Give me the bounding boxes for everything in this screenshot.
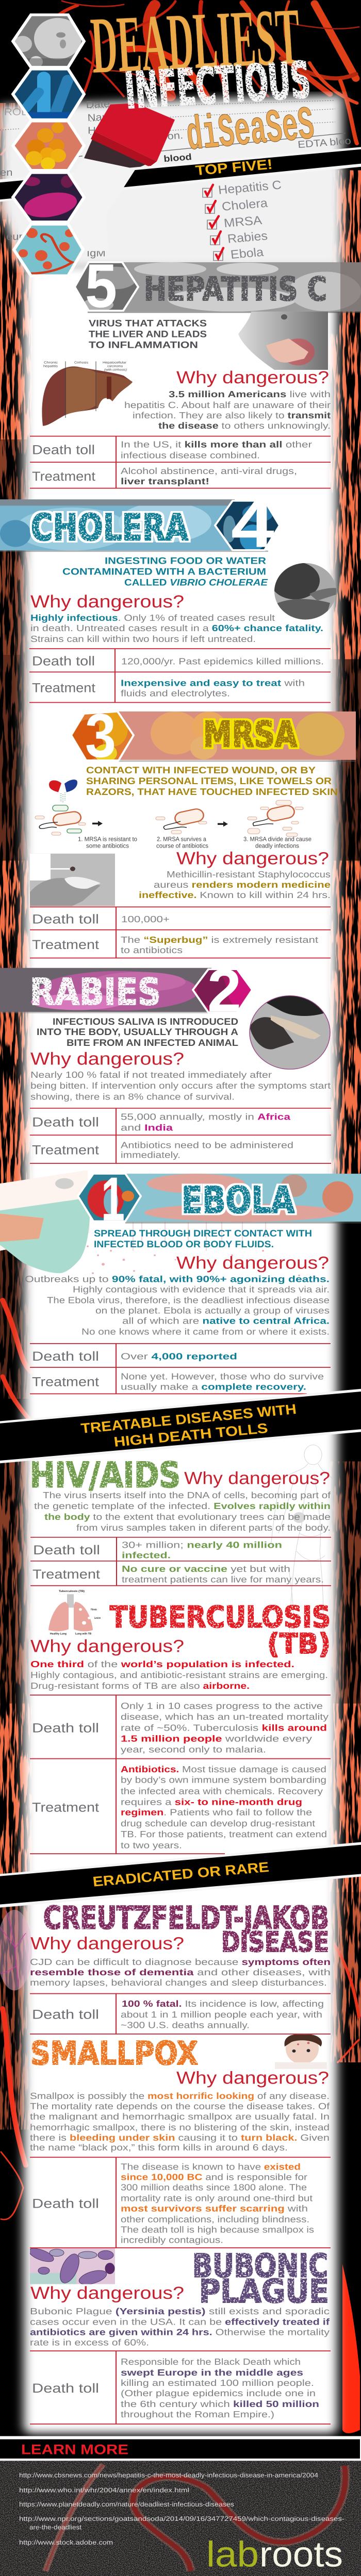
why dangerous: Strains can kill within two hours if left untreated. bbox=[30, 634, 256, 644]
why dangerous bbox=[30, 1934, 331, 1988]
why dangerous: antibiotics are given within 24 hrs. Otherwise the mortality bbox=[30, 2328, 330, 2337]
why dangerous: the name “black pox,” this form kills in around 6 days. bbox=[30, 2143, 288, 2153]
table bbox=[30, 1108, 331, 1163]
lungs diagram: Lesion bbox=[94, 1617, 101, 1620]
table: Antibiotics. Most tissue damage is caused bbox=[121, 1765, 326, 1774]
table: Death toll bbox=[32, 1721, 99, 1735]
hexagon: rabies virus bbox=[10, 172, 88, 223]
lab form paper bbox=[0, 95, 352, 269]
banner: eradicated or rare bbox=[0, 1842, 361, 1908]
logo: labroots bbox=[206, 2534, 343, 2574]
form text: eur bbox=[6, 231, 23, 242]
table bbox=[30, 907, 331, 958]
description: VIRUS THAT ATTACKS bbox=[89, 318, 207, 329]
banner: 2 bbox=[207, 957, 241, 1024]
banner: top five bbox=[0, 147, 361, 211]
why dangerous: Why dangerous? bbox=[176, 849, 329, 869]
table: disease, which has an un-treated mortality bbox=[121, 1712, 329, 1722]
why dangerous: being bitten. If intervention only occurs after the symptoms start bbox=[30, 1081, 331, 1091]
table: The death toll is high because smallpox is bbox=[121, 2225, 314, 2235]
blood splatter bbox=[87, 1222, 300, 1276]
why dangerous: hemorrhagic smallpox, there is no blistering of the skin, instead bbox=[30, 2123, 330, 2132]
form text: EDTA bloo bbox=[297, 135, 352, 150]
icon: capsule bbox=[49, 779, 77, 803]
description bbox=[89, 318, 207, 350]
table: Death toll bbox=[32, 2381, 99, 2396]
table bbox=[30, 1695, 331, 1854]
description: SPREAD THROUGH DIRECT CONTACT WITH bbox=[94, 1228, 312, 1239]
why dangerous: Outbreaks up to 90% fatal, with 90%+ agonizing deaths. bbox=[25, 1275, 330, 1284]
why dangerous: Why dangerous? bbox=[176, 368, 329, 387]
form text: blood bbox=[163, 152, 192, 164]
table: swept Europe in the middle ages bbox=[121, 2368, 303, 2378]
lungs diagram: Healthy Lung bbox=[50, 1632, 67, 1635]
description bbox=[62, 556, 268, 588]
table: Alcohol abstinence, anti-viral drugs, bbox=[121, 466, 297, 476]
liver illustration: Chronic bbox=[44, 361, 58, 364]
diagram: antibiotic resistance: 2. MRSA survives a bbox=[157, 836, 206, 842]
table: immediately. bbox=[121, 1150, 180, 1160]
banner: treatable diseases bbox=[0, 1389, 361, 1463]
illustration: body with blood vessels bbox=[271, 1445, 333, 1650]
description: CONTACT WITH INFECTED WOUND, OR BY bbox=[86, 765, 316, 775]
why dangerous: the disease to others unknowingly. bbox=[158, 421, 331, 431]
arrows bbox=[92, 823, 224, 825]
why dangerous bbox=[30, 1049, 331, 1102]
table: by body’s own immune system bombarding bbox=[121, 1775, 326, 1785]
why dangerous: The mortality rate depends on the course the disease takes. Of bbox=[30, 2102, 330, 2112]
why dangerous: Nearly 100 % fatal if not treated immediately after bbox=[30, 1070, 272, 1080]
table: Death toll bbox=[32, 912, 99, 927]
why dangerous bbox=[34, 1469, 331, 1533]
table: incredibly contagious. bbox=[121, 2235, 223, 2245]
banner: EBOLA bbox=[182, 1179, 294, 1222]
lungs diagram: Fibrosis bbox=[91, 1608, 97, 1611]
table: liver transplant! bbox=[121, 477, 209, 486]
table: and India bbox=[121, 1123, 173, 1133]
banner: RABIES bbox=[30, 971, 161, 1013]
banner bbox=[0, 499, 278, 552]
why dangerous: Highly infectious . Only 1% of treated cases result bbox=[30, 613, 275, 623]
description: SHARING PERSONAL ITEMS, LIKE TOWELS OR bbox=[86, 776, 332, 786]
photo: surgical mask bbox=[0, 1170, 90, 1273]
description: TO INFLAMMATION bbox=[89, 340, 198, 350]
table: the 6th century which killed 50 million bbox=[121, 2399, 319, 2409]
liver illustration: Hepatocellular bbox=[103, 361, 127, 364]
table: since 10,000 BC and is responsible for bbox=[121, 2173, 307, 2182]
why dangerous: Highly contagious, and antibiotic-resistant strains are emerging. bbox=[30, 1670, 328, 1680]
table: Treatment bbox=[32, 1143, 99, 1158]
why dangerous: Smallpox is possibly the most horrific looking of any disease. bbox=[30, 2091, 330, 2101]
description bbox=[86, 765, 338, 797]
table: mortality rate is only around one-third but bbox=[121, 2194, 313, 2204]
table: Over 4,000 reported bbox=[121, 1352, 237, 1362]
form text: on. bbox=[167, 129, 184, 142]
logo: labroots: lab bbox=[206, 2534, 259, 2574]
table: Treatment bbox=[32, 681, 95, 696]
description: CONTAMINATED WITH A BACTERIUM bbox=[62, 567, 266, 577]
why dangerous: from virus samples taken in diferent parts of the body. bbox=[76, 1523, 331, 1533]
table: year, second only to malaria. bbox=[121, 1745, 266, 1755]
why dangerous: the body to the extent that evolutionary trees can be made bbox=[44, 1512, 331, 1522]
heading: SMALLPOX bbox=[30, 2035, 198, 2072]
banner: MRSA bbox=[203, 714, 297, 755]
table: to antibiotics bbox=[121, 945, 183, 955]
table: rate of ~50%. Tuberculosis kills around bbox=[121, 1723, 327, 1733]
why dangerous: The Ebola virus, therefore, is the deadliest infectious disease bbox=[47, 1296, 330, 1306]
footer texture panel bbox=[0, 2461, 361, 2576]
table: 30+ million; nearly 40 million bbox=[122, 1540, 282, 1550]
why dangerous: Why dangerous? bbox=[30, 1934, 184, 1953]
form text: IgM bbox=[87, 247, 106, 259]
banner: treatable diseases: TREATABLE DISEASES WITH bbox=[80, 1401, 297, 1436]
lungs diagram: Lung with TB bbox=[75, 1632, 92, 1635]
why dangerous: hepatitis C. About half are unaware of their bbox=[124, 400, 331, 410]
section: Creutzfeldt-Jakob disease bbox=[0, 1900, 331, 2034]
table: to two years. bbox=[121, 1841, 182, 1851]
description: INTO THE BODY, USUALLY THROUGH A bbox=[37, 1027, 238, 1038]
table: 120,000/yr. Past epidemics killed millions. bbox=[121, 657, 324, 667]
heading bbox=[110, 1600, 331, 1660]
form text: Date.. bbox=[86, 98, 117, 110]
why dangerous: No one knows where it came from or where it exists. bbox=[81, 1327, 330, 1337]
table: throughout the Roman Empire.) bbox=[121, 2410, 274, 2419]
title bbox=[89, 0, 317, 163]
section: MRSA bbox=[30, 701, 356, 958]
table: Inexpensive and easy to treat with bbox=[121, 679, 305, 688]
table: usually make a complete recovery. bbox=[121, 1382, 306, 1392]
logo: labroots: roots bbox=[259, 2534, 343, 2574]
why dangerous bbox=[30, 1637, 328, 1691]
banner: 4 bbox=[231, 486, 274, 561]
table: Death toll bbox=[32, 1349, 99, 1364]
table: Death toll bbox=[32, 2008, 99, 2022]
table bbox=[30, 2351, 331, 2424]
why dangerous: all of which are native to central Africa. bbox=[122, 1316, 330, 1326]
section: rabies bbox=[0, 957, 333, 1163]
diagram: antibiotic resistance: course of antibiotics bbox=[156, 842, 208, 849]
table: (Other plague epidemics include one in bbox=[121, 2388, 316, 2398]
table bbox=[30, 436, 331, 488]
table: Death toll bbox=[32, 443, 95, 457]
checklist bbox=[203, 178, 282, 261]
why dangerous: Why dangerous? bbox=[176, 1253, 329, 1273]
checklist: MRSA bbox=[223, 213, 262, 230]
table: Treatment bbox=[32, 469, 95, 484]
table: Responsible for the Black Death which bbox=[121, 2357, 301, 2367]
table: 100 % fatal. Its incidence is low, affecting bbox=[122, 1999, 324, 2009]
form text: en bbox=[0, 167, 12, 178]
references bbox=[19, 2472, 344, 2547]
why dangerous: cases occur even in the USA. It can be effectively treated if bbox=[30, 2317, 330, 2327]
table: In the US, it kills more than all other bbox=[121, 440, 312, 450]
banner: learn more bbox=[0, 2436, 361, 2461]
diagram: antibiotic resistance: deadly infections bbox=[255, 842, 299, 849]
table: The “Superbug” is extremely resistant bbox=[121, 935, 318, 945]
description bbox=[94, 1228, 312, 1249]
why dangerous: The virus inserts itself into the DNA of cells, becoming part of bbox=[43, 1490, 331, 1500]
description: INFECTED BLOOD OR BODY FLUIDS. bbox=[94, 1239, 274, 1249]
test tube bbox=[46, 103, 175, 251]
table: No cure or vaccine yet but with bbox=[122, 1564, 290, 1574]
liver illustration: carcinoma bbox=[107, 364, 123, 368]
references: http://www.npr.org/sections/goatsandsoda/2014/09/16/347727459/which-contagious-diseases- bbox=[19, 2516, 344, 2522]
heading bbox=[43, 1900, 329, 1958]
table bbox=[30, 1537, 331, 1586]
checklist: Cholera bbox=[221, 196, 269, 213]
white centre panel bbox=[24, 264, 337, 2433]
diagram: antibiotic resistance: 1. MRSA is resistant to bbox=[78, 836, 137, 842]
table: infectious disease combined. bbox=[121, 451, 260, 461]
banner bbox=[0, 968, 251, 1013]
table: TB. For those patients, treatment can extend bbox=[121, 1829, 327, 1839]
hexagon: ebola virus bbox=[10, 223, 88, 277]
why dangerous: Why dangerous? bbox=[30, 592, 184, 612]
why dangerous: the genetic template of the infected. Evolves rapidly within bbox=[34, 1501, 331, 1511]
banner bbox=[72, 711, 356, 761]
why dangerous: Why dangerous? bbox=[30, 1637, 184, 1656]
why dangerous: infection. They are also likely to transmit bbox=[133, 411, 331, 420]
why dangerous bbox=[30, 592, 323, 644]
why dangerous: rate is in excess of 60%. bbox=[30, 2338, 149, 2348]
banner: learn more: LEARN MORE bbox=[21, 2442, 128, 2457]
liver illustration: hepatitis bbox=[43, 364, 58, 368]
description: THE LIVER AND LEADS bbox=[89, 329, 207, 340]
form text: H bbox=[88, 125, 96, 136]
why dangerous: Why dangerous? bbox=[184, 1469, 330, 1488]
references: https://www.planetdeadly.com/nature/deadliest-infectious-diseases bbox=[19, 2501, 234, 2509]
section: hepatitis C bbox=[30, 251, 361, 488]
why dangerous: memory lapses, behavioral changes and sleep disturbances. bbox=[30, 1978, 327, 1988]
why dangerous bbox=[30, 2284, 330, 2348]
form text: Nam bbox=[87, 111, 112, 123]
table: the infected area with chemicals. Recovery bbox=[121, 1787, 323, 1797]
section: smallpox bbox=[30, 2033, 331, 2248]
section: bubonic plague bbox=[27, 2246, 331, 2424]
banner: treatable diseases: HIGH DEATH TOLLS bbox=[113, 1420, 269, 1450]
table: treatment patients can live for many years. bbox=[122, 1575, 324, 1585]
photo: child drinking bbox=[274, 563, 336, 620]
banner: 5 bbox=[85, 251, 117, 320]
section: tuberculosis bbox=[30, 1590, 331, 1854]
table: 55,000 annually, mostly in Africa bbox=[121, 1112, 291, 1122]
banner: 3 bbox=[85, 701, 116, 770]
table bbox=[30, 1344, 331, 1394]
table: fluids and electrolytes. bbox=[121, 689, 230, 699]
why dangerous: ineffective. Known to kill within 24 hrs. bbox=[139, 890, 331, 900]
why dangerous bbox=[124, 368, 331, 431]
diagram: antibiotic resistance: 3. MRSA divide and cause bbox=[243, 836, 311, 842]
references: http://www.stock.adobe.com bbox=[19, 2539, 113, 2547]
banner bbox=[76, 261, 361, 313]
form text bbox=[0, 98, 352, 259]
hexagon: cholera bacteria bbox=[10, 67, 88, 121]
table bbox=[29, 649, 331, 703]
why dangerous bbox=[30, 2069, 330, 2153]
table: Treatment bbox=[32, 1375, 99, 1389]
why dangerous: 3.5 million Americans live with bbox=[169, 389, 331, 399]
checklist: Hepatitis C bbox=[218, 178, 282, 197]
why dangerous: Bubonic Plague (Yersinia pestis) still exists and sporadic bbox=[30, 2307, 330, 2316]
why dangerous: aureus renders modern medicine bbox=[154, 880, 331, 890]
table: Death toll bbox=[32, 1115, 99, 1130]
why dangerous bbox=[139, 849, 331, 900]
table: Treatment bbox=[32, 1801, 99, 1815]
references: are-the-deadliest bbox=[29, 2524, 81, 2531]
heading bbox=[192, 2247, 329, 2310]
why dangerous: Why dangerous? bbox=[176, 2069, 329, 2088]
form text: ROL bbox=[4, 106, 27, 117]
table: infected. bbox=[122, 1551, 171, 1561]
why dangerous: Highly contagious with evidence that it spreads via air. bbox=[73, 1285, 330, 1295]
lungs diagram: Tuberculosis (TB) bbox=[59, 1590, 85, 1593]
table: 100,000+ bbox=[121, 914, 170, 924]
table: requires a six- to nine-month drug bbox=[121, 1798, 302, 1807]
footer bbox=[0, 2436, 361, 2576]
banner: 1 bbox=[101, 1165, 125, 1234]
photo: child with smallpox bbox=[275, 2033, 327, 2069]
table: The disease is known to have existed bbox=[121, 2162, 301, 2172]
top five heading: TOP FIVE! bbox=[194, 156, 273, 178]
description bbox=[37, 1017, 238, 1048]
why dangerous: Why dangerous? bbox=[30, 2284, 184, 2303]
table: 300 million deaths since 1800 alone. The bbox=[121, 2183, 307, 2193]
table bbox=[30, 2157, 331, 2248]
why dangerous: in death. Untreated cases result in a 60%+ chance fatality. bbox=[30, 623, 323, 634]
banner bbox=[77, 1174, 361, 1224]
references: http://www.who.int/whr/2004/annex/en/index.html bbox=[19, 2487, 189, 2494]
table: regimen . Patients who fail to follow the bbox=[121, 1808, 312, 1818]
table: most survivors suffer scarring with bbox=[121, 2204, 308, 2214]
liver illustration: Cirrhosis bbox=[74, 361, 88, 364]
illustration: neural lightning bbox=[0, 1910, 32, 1991]
hexagon: virus grey bbox=[10, 13, 88, 70]
why dangerous: on the planet. Ebola is actually a group of viruses bbox=[95, 1306, 330, 1316]
why dangerous: Methicillin-resistant Staphylococcus bbox=[167, 870, 331, 879]
banner: eradicated or rare: ERADICATED OR RARE bbox=[92, 1859, 270, 1890]
liver illustration bbox=[42, 361, 133, 426]
table: Only 1 in 10 cases progress to the active bbox=[121, 1701, 323, 1711]
description: RAZORS, THAT HAVE TOUCHED INFECTED SKIN bbox=[86, 787, 338, 797]
table: other complications, including blindness. bbox=[121, 2215, 309, 2225]
why dangerous: CJD can be difficult to diagnose because symptoms often bbox=[30, 1957, 331, 1967]
table: Treatment bbox=[32, 1567, 100, 1582]
table: Death toll bbox=[32, 2197, 99, 2211]
why dangerous: Drug-resistant forms of TB are also airborne. bbox=[30, 1681, 250, 1691]
torso photo bbox=[238, 312, 328, 370]
photo: wound swab bbox=[30, 854, 115, 906]
why dangerous: the malignant and hemorrhagic smallpox are usually fatal. In bbox=[30, 2112, 330, 2122]
table: Treatment bbox=[32, 938, 99, 952]
why dangerous bbox=[25, 1253, 330, 1337]
photo: rabid dog bbox=[248, 995, 333, 1072]
description: BITE FROM AN INFECTED ANIMAL bbox=[67, 1038, 238, 1048]
liver illustration: (with cirrhosis) bbox=[104, 368, 127, 371]
references: http://www.cbsnews.com/news/hepatitis-c-the-most-deadly-infectious-disease-in-america/2004 bbox=[19, 2472, 318, 2479]
table: ~300 U.S. deaths annually. bbox=[121, 2021, 250, 2030]
table: drug schedule can develop drug-resistant bbox=[121, 1819, 315, 1828]
description: CALLED VIBRIO CHOLERAE bbox=[124, 578, 268, 588]
table: about 1 in 1 million people each year, with bbox=[121, 2010, 322, 2020]
form text: gG bbox=[87, 235, 102, 247]
lungs diagram bbox=[48, 1590, 101, 1635]
description: INFECTIOUS SALIVA IS INTRODUCED bbox=[53, 1017, 238, 1027]
why dangerous: Why dangerous? bbox=[30, 1049, 184, 1069]
table bbox=[30, 1994, 331, 2034]
description: INGESTING FOOD OR WATER bbox=[105, 556, 266, 566]
section: ebola bbox=[0, 1165, 361, 1394]
why dangerous: showing, there is an 8% chance of survival. bbox=[30, 1092, 235, 1102]
checklist: Rabies bbox=[227, 229, 268, 246]
why dangerous: resemble those of dementia and other diseases, with bbox=[30, 1968, 331, 1977]
heading: PLAGUE bbox=[199, 2273, 329, 2310]
diagram: antibiotic resistance: some antibiotics bbox=[86, 842, 129, 849]
table: Death toll bbox=[33, 1543, 100, 1557]
table: None yet. However, those who do survive bbox=[121, 1372, 324, 1382]
why dangerous: there is bleeding under skin causing it to turn black. Given bbox=[30, 2133, 330, 2143]
table: 1.5 million people worldwide every bbox=[121, 1734, 312, 1744]
heading: (TB) bbox=[267, 1628, 331, 1660]
section: HIV/AIDS bbox=[30, 1445, 333, 1650]
why dangerous: One third of the world’s population is infected. bbox=[30, 1659, 294, 1670]
banner: CHOLERA bbox=[31, 506, 188, 549]
header veins bbox=[1, 1, 359, 155]
table: Death toll bbox=[32, 654, 95, 668]
photo: plague bacteria bbox=[30, 2248, 115, 2284]
diagram: antibiotic resistance bbox=[35, 779, 311, 849]
checklist: Ebola bbox=[230, 245, 265, 261]
table: killing an estimated 100 million people. bbox=[121, 2378, 314, 2388]
heading: HIV/AIDS bbox=[30, 1455, 180, 1496]
hexagon: mrsa bacteria bbox=[10, 120, 88, 172]
section: cholera bbox=[0, 486, 338, 703]
table: Antibiotics need to be administered bbox=[121, 1141, 293, 1150]
